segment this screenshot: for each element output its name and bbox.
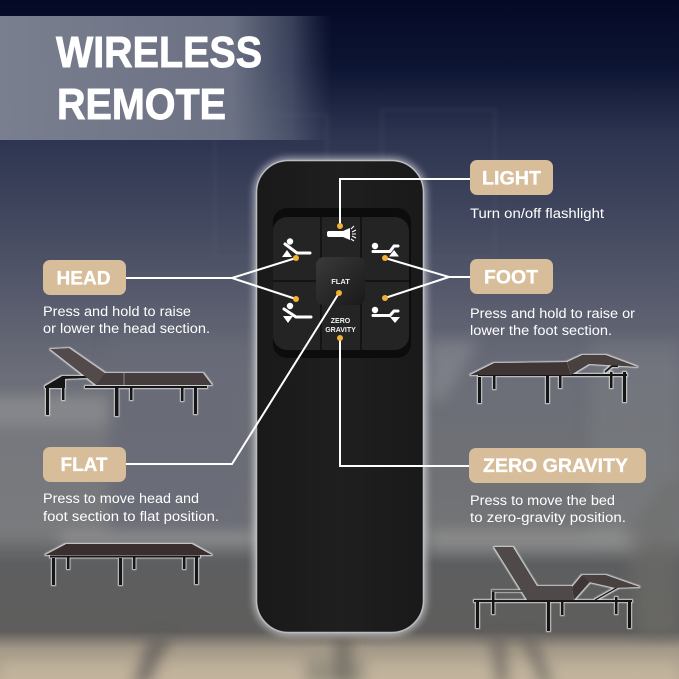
- label: light: LIGHT: [482, 168, 541, 190]
- zero gravity button text: GRAVITY: [325, 327, 356, 334]
- label: light: [470, 160, 553, 195]
- bed: head raised: [45, 348, 212, 416]
- text: light description: Turn on/off flashlight: [470, 206, 604, 221]
- remote control: [254, 158, 426, 635]
- text: foot description: lower the foot section.: [470, 323, 612, 338]
- title banner: REMOTE: [57, 80, 226, 129]
- zero gravity button text: ZERO: [331, 318, 351, 325]
- button panel: [273, 208, 411, 358]
- text: zero gravity description: Press to move the bed: [470, 493, 615, 508]
- icon: foot down: [372, 307, 400, 323]
- label: flat: FLAT: [60, 455, 108, 476]
- text: head description: Press and hold to raise: [43, 304, 191, 319]
- text: flat description: [43, 491, 219, 524]
- bed: flat: [45, 544, 212, 585]
- title banner: WIRELESS: [56, 28, 262, 77]
- connector dots: [293, 223, 388, 341]
- label: head: HEAD: [56, 268, 110, 290]
- label: foot: FOOT: [484, 268, 538, 288]
- text: foot description: Press and hold to raise or: [470, 306, 636, 321]
- flat button: [316, 257, 365, 305]
- text: flat description: Press to move head and: [43, 491, 199, 506]
- text: zero gravity description: [470, 493, 626, 525]
- title banner: [0, 16, 332, 140]
- zero gravity button text: [325, 318, 356, 334]
- text: zero gravity description: to zero-gravity position.: [470, 510, 626, 525]
- text: flat description: foot section to flat position.: [43, 509, 219, 524]
- bed: foot raised: [470, 355, 638, 403]
- label: flat: [43, 447, 126, 482]
- connector lines: [126, 179, 470, 466]
- icon: flashlight: [327, 226, 356, 241]
- icon: foot up: [372, 243, 399, 256]
- label: foot: [470, 259, 553, 294]
- label: head: [43, 260, 126, 295]
- text: head description: [43, 304, 210, 336]
- label: zero gravity: [469, 448, 646, 483]
- icon: head down: [283, 303, 311, 323]
- label: zero gravity: ZERO GRAVITY: [483, 456, 628, 477]
- icon: head up: [282, 238, 310, 257]
- flat button: FLAT: [331, 277, 350, 286]
- text: head description: or lower the head section.: [43, 321, 210, 336]
- bed: zero gravity: [474, 547, 640, 631]
- text: foot description: [470, 306, 636, 338]
